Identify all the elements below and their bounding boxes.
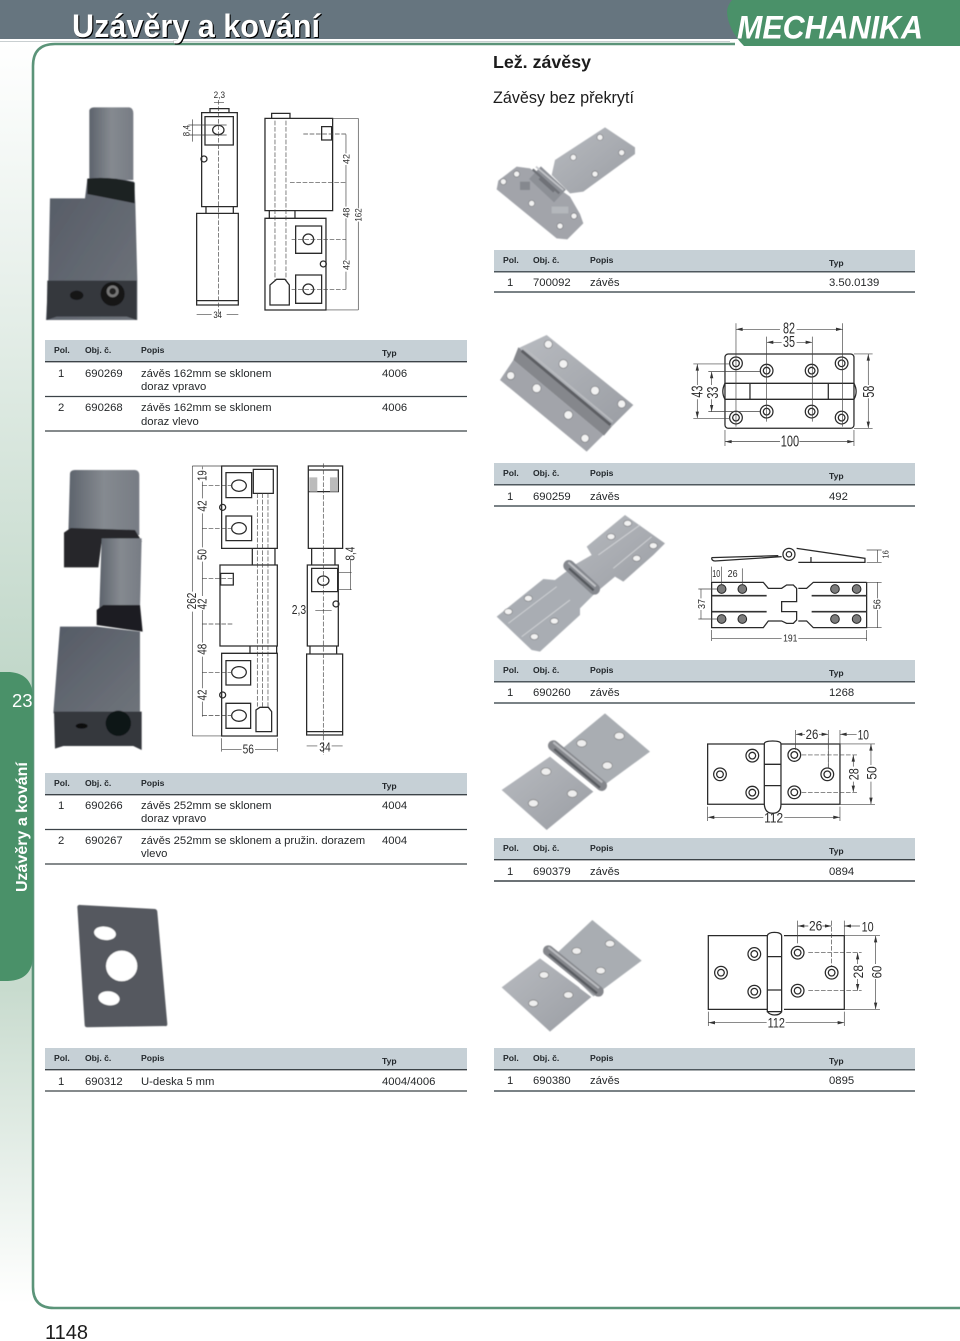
table: 690269 and 690268: 690269 (85, 368, 123, 380)
photo: hinge 690260 (502, 713, 650, 830)
table: 700092 (494, 250, 915, 292)
photo: hinge 690259 (497, 515, 665, 652)
table: 690259: Obj. č. (533, 468, 559, 478)
table: 690260: Pol. (503, 665, 519, 675)
table: 690312: Obj. č. (85, 1053, 111, 1063)
table: 690259: Pol. (503, 468, 519, 478)
drawing: hinge 112 x 50 dimensions: 28 (845, 768, 861, 780)
drawing: hinge 162mm dimensions: 2,3 (214, 90, 225, 100)
table: 690269 and 690268: Pol. (54, 345, 70, 355)
table: 690312: 1 (58, 1076, 64, 1088)
drawing: hinge 112 x 50 dimensions: 50 (864, 766, 880, 780)
side tab (0, 672, 33, 981)
drawing: hinge 191 x 56 dimensions: 191 (783, 633, 798, 644)
drawing: hinge 252mm dimensions: 56 (243, 743, 254, 757)
table: 690380: závěs (590, 1075, 620, 1087)
header bar (0, 0, 960, 42)
drawing: hinge with 100 x 58 dimensions: 100 (781, 434, 799, 451)
table: 690380: 1 (507, 1075, 513, 1087)
table: 690379 (494, 838, 915, 881)
table: 690269 and 690268: 2 (58, 402, 64, 414)
drawing: hinge 112 x 60 dimensions (708, 918, 884, 1031)
table: 690312: Pol. (54, 1053, 70, 1063)
drawing: hinge 191 x 56 dimensions: 56 (873, 599, 884, 609)
drawing: hinge 252mm dimensions: 42 (196, 689, 210, 700)
table: 690269 and 690268: závěs 162mm se sklonem (141, 402, 272, 414)
table: 690266 and 690267: Popis (141, 778, 165, 788)
table: 690260: 690260 (533, 687, 571, 699)
table: 690260: závěs (590, 687, 620, 699)
drawing: hinge 112 x 60 dimensions: 112 (768, 1015, 785, 1031)
table: 690266 and 690267: Pol. (54, 778, 70, 788)
section tab: MECHANIKA: MECHANIKA (737, 10, 923, 46)
table: 690266 and 690267: 690266 (85, 800, 123, 812)
table: 690312 (45, 1048, 467, 1091)
drawing: hinge 162mm dimensions: 42 (342, 260, 352, 270)
table: 690380 (494, 1048, 915, 1091)
table: 690259: závěs (590, 491, 620, 503)
table: 690312: Typ (382, 1056, 397, 1066)
table: 690380: Pol. (503, 1053, 519, 1063)
subheading: Závěsy bez překrytí (493, 89, 634, 107)
table: 690379: 1 (507, 866, 513, 878)
photo: U plate (77, 905, 167, 1027)
table: 690269 and 690268: Obj. č. (85, 345, 111, 355)
table: 690380: 0895 (829, 1075, 854, 1087)
drawing: hinge 191 x 56 dimensions: 16 (880, 550, 890, 558)
heading: Lež. závěsy (493, 52, 591, 72)
table: 690379: Obj. č. (533, 843, 559, 853)
drawing: hinge 162mm dimensions: 42 (342, 154, 352, 164)
side tab: Uzávěry a kování (14, 762, 31, 892)
drawing: hinge 162mm dimensions (181, 90, 364, 320)
table: 690266 and 690267: závěs 252mm se sklonem a pružin. dorazem (141, 835, 365, 847)
drawing: hinge 162mm dimensions: 162 (354, 208, 364, 222)
drawing: hinge with 100 x 58 dimensions: 43 (690, 386, 707, 398)
table: 700092: 1 (507, 277, 513, 289)
table: 690269 and 690268 (45, 340, 467, 431)
table: 700092: Popis (590, 255, 614, 265)
table: 690260: 1 (507, 687, 513, 699)
table: 690269 and 690268: 4006 (382, 402, 407, 414)
drawing: hinge 112 x 50 dimensions: 26 (806, 726, 818, 742)
table: 700092: závěs (590, 277, 620, 289)
drawing: hinge 112 x 50 dimensions: 112 (764, 809, 783, 825)
table: 690379: Popis (590, 843, 614, 853)
drawing: hinge 252mm dimensions: 8,4 (343, 547, 357, 561)
drawing: hinge 252mm dimensions: 42 (196, 500, 210, 512)
table: 690259: Popis (590, 468, 614, 478)
table: 690266 and 690267: 4004 (382, 800, 407, 812)
table: 690269 and 690268: Typ (382, 348, 397, 358)
table: 690260: 1268 (829, 687, 854, 699)
table: 690259: 690259 (533, 491, 571, 503)
drawing: hinge with 100 x 58 dimensions: 35 (783, 334, 795, 351)
table: 690266 and 690267: Typ (382, 781, 397, 791)
table: 700092: 700092 (533, 277, 571, 289)
table: 690269 and 690268: 1 (58, 368, 64, 380)
drawing: hinge 252mm dimensions: 42 (196, 598, 210, 609)
table: 690379: 690379 (533, 866, 571, 878)
table: 690269 and 690268: závěs 162mm se sklonem (141, 368, 272, 380)
drawing: hinge 191 x 56 dimensions (697, 548, 890, 644)
table: 690266 and 690267: doraz vpravo (141, 813, 206, 825)
table: 690379: Pol. (503, 843, 519, 853)
table: 690266 and 690267: 2 (58, 835, 64, 847)
drawing: hinge 112 x 50 dimensions (708, 726, 880, 825)
table: 690260: Popis (590, 665, 614, 675)
drawing: hinge 112 x 60 dimensions: 10 (862, 918, 874, 934)
table: 690269 and 690268: 690268 (85, 402, 123, 414)
table: 690269 and 690268: doraz vlevo (141, 416, 199, 428)
table: 690269 and 690268: doraz vpravo (141, 381, 206, 393)
table: 700092: Pol. (503, 255, 519, 265)
table: 700092: 3.50.0139 (829, 277, 879, 289)
drawing: hinge with 100 x 58 dimensions: 33 (705, 387, 722, 399)
drawing: hinge 252mm dimensions: 19 (196, 470, 210, 481)
drawing: hinge 162mm dimensions: 8,4 (181, 125, 191, 136)
table: 690379: Typ (829, 846, 844, 856)
table: 690266 and 690267: závěs 252mm se sklonem (141, 800, 272, 812)
drawing: hinge 252mm dimensions: 2,3 (292, 603, 306, 617)
drawing: hinge 252mm dimensions (185, 463, 357, 757)
table: 690266 and 690267: 1 (58, 800, 64, 812)
table: 690380: 690380 (533, 1075, 571, 1087)
photo: hinge 690269 two-leaf (500, 335, 633, 452)
drawing: hinge with 100 x 58 dimensions (690, 321, 878, 451)
table: 700092: Typ (829, 258, 844, 268)
table: 690266 and 690267 (45, 773, 467, 864)
section tab: MECHANIKA (727, 0, 960, 46)
drawing: hinge 191 x 56 dimensions: 37 (697, 599, 708, 609)
table: 690259 (494, 463, 915, 506)
table: 700092: Obj. č. (533, 255, 559, 265)
table: 690259: 492 (829, 491, 848, 503)
left gradient strip (0, 42, 33, 1304)
table: 690380: Obj. č. (533, 1053, 559, 1063)
drawing: hinge 252mm dimensions: 48 (196, 644, 210, 655)
photo: hinge 162mm (46, 107, 137, 320)
photo: hinge 700092 (497, 127, 635, 239)
table: 690266 and 690267: 4004 (382, 835, 407, 847)
drawing: hinge 191 x 56 dimensions: 26 (728, 569, 738, 580)
drawing: hinge 112 x 50 dimensions: 10 (858, 726, 869, 742)
side tab: 23 (12, 690, 33, 711)
table: 690260: Typ (829, 668, 844, 678)
drawing: hinge 252mm dimensions: 262 (185, 593, 199, 609)
table: 690312: 4004/4006 (382, 1076, 435, 1088)
photo: hinge 252mm (53, 470, 143, 750)
drawing: hinge 112 x 60 dimensions: 28 (850, 965, 866, 978)
table: 690259: Typ (829, 471, 844, 481)
table: 690380: Typ (829, 1056, 844, 1066)
table: 690312: U-deska 5 mm (141, 1076, 214, 1088)
table: 690260 (494, 660, 915, 703)
drawing: hinge 112 x 60 dimensions: 26 (809, 918, 822, 934)
drawing: hinge 162mm dimensions: 34 (213, 310, 222, 320)
table: 690266 and 690267: Obj. č. (85, 778, 111, 788)
table: 690312: 690312 (85, 1076, 123, 1088)
table: 690259: 1 (507, 491, 513, 503)
drawing: hinge 112 x 60 dimensions: 60 (868, 965, 884, 978)
table: 690269 and 690268: 4006 (382, 368, 407, 380)
title: Uzávěry a kování (72, 8, 321, 44)
drawing: hinge 191 x 56 dimensions: 10 (712, 569, 721, 580)
table: 690380: Popis (590, 1053, 614, 1063)
drawing: hinge with 100 x 58 dimensions: 58 (861, 386, 878, 398)
drawing: hinge 252mm dimensions: 50 (196, 549, 210, 560)
table: 690312: Popis (141, 1053, 165, 1063)
table: 690266 and 690267: 690267 (85, 835, 123, 847)
drawing: hinge with 100 x 58 dimensions: 82 (783, 321, 795, 338)
table: 690260: Obj. č. (533, 665, 559, 675)
table: 690379: závěs (590, 866, 620, 878)
table: 690266 and 690267: vlevo (141, 848, 167, 860)
photo: hinge 690380 (502, 920, 642, 1032)
drawing: hinge 252mm dimensions: 34 (319, 741, 331, 755)
table: 690269 and 690268: Popis (141, 345, 165, 355)
drawing: hinge 162mm dimensions: 48 (342, 208, 352, 218)
table: 690379: 0894 (829, 866, 854, 878)
